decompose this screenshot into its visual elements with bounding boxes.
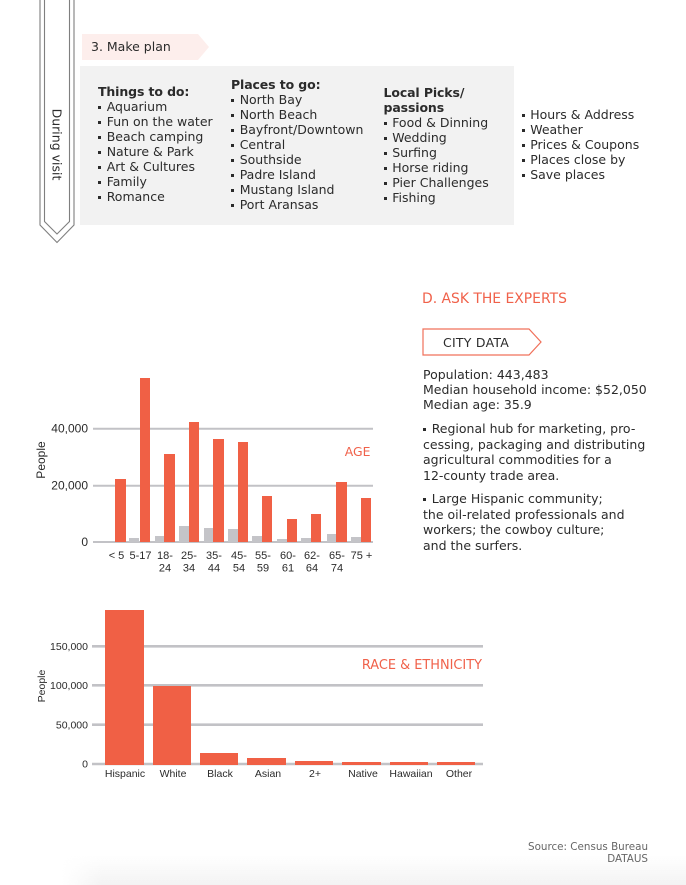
bar chart: race and ethnicity: People	[36, 669, 48, 702]
heading: ask the experts: D. ASK THE EXPERTS	[422, 291, 567, 307]
list: places to go: Port Aransas	[240, 197, 318, 212]
city note: regional hub: cessing, packaging and distributing	[423, 436, 645, 452]
icon: during visit down arrow ribbon	[39, 0, 75, 244]
bar chart: age: AGE	[345, 444, 371, 459]
list: local picks: Food & Dinning	[392, 115, 488, 130]
panel: make plan lists	[80, 66, 514, 225]
bar chart: race and ethnicity: RACE & ETHNICITY	[362, 658, 482, 673]
list: places to go	[231, 77, 363, 212]
bar chart: age: 5-17	[129, 550, 152, 562]
bar chart: race and ethnicity: 150,000	[50, 641, 88, 653]
bar chart: age: 54	[233, 562, 245, 574]
source credit	[528, 841, 648, 865]
list: local picks: Pier Challenges	[392, 175, 489, 190]
list: things to do	[98, 84, 213, 204]
bar chart: race and ethnicity: Hawaiian	[389, 768, 433, 780]
list: things to do: Fun on the water	[107, 114, 213, 129]
list: things to do: Beach camping	[107, 129, 203, 144]
bar chart: age: 64	[306, 562, 318, 574]
bar chart: age: 34	[183, 562, 195, 574]
list: local picks: Fishing	[392, 190, 436, 205]
bar chart: race and ethnicity: Native	[348, 768, 378, 780]
list: place details: Weather	[530, 122, 583, 137]
step heading: 3. Make plan	[82, 34, 209, 60]
list: places to go: North Bay	[240, 92, 302, 107]
list: local picks: Wedding	[392, 130, 447, 145]
step label: 3. Make plan	[91, 39, 171, 54]
bar chart: age: 25-	[181, 550, 197, 562]
bar chart: age: 24	[159, 562, 171, 574]
list: places to go: Places to go:	[231, 77, 320, 92]
list: places to go: Padre Island	[240, 167, 316, 182]
list: place details: Save places	[530, 167, 605, 182]
bar chart: age: 59	[257, 562, 269, 574]
list: places to go: Bayfront/Downtown	[240, 122, 363, 137]
city note: community: Large Hispanic community;	[432, 491, 603, 506]
list: places to go: Mustang Island	[240, 182, 334, 197]
bar chart: age: 35-	[206, 550, 222, 562]
list: places to go: Southside	[240, 152, 302, 167]
list: place details: Hours & Address	[530, 107, 634, 122]
list: things to do: Romance	[107, 189, 165, 204]
city statistics: Median age: 35.9	[423, 397, 532, 412]
list: local picks: Surfing	[392, 145, 437, 160]
city statistics: Population: 443,483	[423, 367, 549, 382]
list: place details: Prices & Coupons	[530, 137, 639, 152]
bar chart: age: 18-	[157, 550, 173, 562]
tag: city data	[422, 328, 542, 356]
bar chart: age: < 5	[109, 550, 124, 562]
list: local picks: Local Picks/	[384, 85, 464, 100]
tag label: CITY DATA	[443, 335, 509, 350]
list: local picks	[384, 85, 489, 205]
bar chart: age: 65-	[329, 550, 345, 562]
bar chart: race and ethnicity: White	[160, 768, 187, 780]
city note: regional hub: 12-county trade area.	[423, 468, 559, 482]
list: places to go: Central	[240, 137, 285, 152]
bar chart: race and ethnicity: Hispanic	[105, 768, 145, 780]
source credit: DATAUS	[607, 853, 648, 865]
bottom shadow fade	[89, 876, 686, 885]
bar chart: race and ethnicity: Asian	[255, 768, 281, 780]
bar chart: age: People	[34, 441, 48, 479]
city statistics	[423, 367, 647, 412]
bar chart: race and ethnicity: 50,000	[56, 720, 88, 732]
city statistics: Median household income: $52,050	[423, 382, 647, 397]
bar chart: age: 0	[81, 535, 88, 549]
list: things to do: Nature & Park	[107, 144, 194, 159]
list: place details	[522, 107, 639, 182]
bar chart: age: 20,000	[51, 478, 88, 492]
list: local picks: Horse riding	[392, 160, 468, 175]
during visit label: During visit	[50, 108, 64, 180]
bar chart: age: 45-	[231, 550, 247, 562]
bar chart: age: 74	[331, 562, 343, 574]
city note: community: the oil-related professionals and	[423, 507, 625, 522]
list: places to go: North Beach	[240, 107, 317, 122]
list: things to do: Art & Cultures	[107, 159, 195, 174]
source credit: Source: Census Bureau	[528, 841, 648, 853]
bar chart: age: 60-	[280, 550, 296, 562]
city note: community: workers; the cowboy culture;	[423, 522, 604, 537]
bar chart: age: 62-	[304, 550, 320, 562]
bar chart: age: 55-	[255, 550, 271, 562]
bar chart: race and ethnicity: Black	[207, 768, 234, 780]
city note: community	[423, 491, 625, 553]
bar chart: age: 40,000	[51, 422, 88, 436]
list: things to do: Things to do:	[98, 84, 189, 99]
city note: community: and the surfers.	[423, 538, 522, 553]
bar chart: race and ethnicity: 0	[82, 758, 88, 770]
list: things to do: Aquarium	[107, 99, 167, 114]
city note: regional hub: agricultural commodities for a	[423, 452, 612, 467]
city note: regional hub: Regional hub for marketing, pro-	[432, 421, 635, 436]
list: place details: Places close by	[530, 152, 625, 167]
bar chart: age: 75 +	[351, 550, 372, 562]
city note: regional hub	[423, 421, 645, 482]
list: things to do: Family	[107, 174, 147, 189]
list: local picks: passions	[384, 100, 444, 115]
bar chart: race and ethnicity: 2+	[309, 768, 321, 780]
bar chart: age: 61	[282, 562, 294, 574]
bar chart: race and ethnicity: 100,000	[50, 680, 88, 692]
bar chart: age: 44	[208, 562, 220, 574]
bar chart: race and ethnicity: Other	[446, 768, 473, 780]
